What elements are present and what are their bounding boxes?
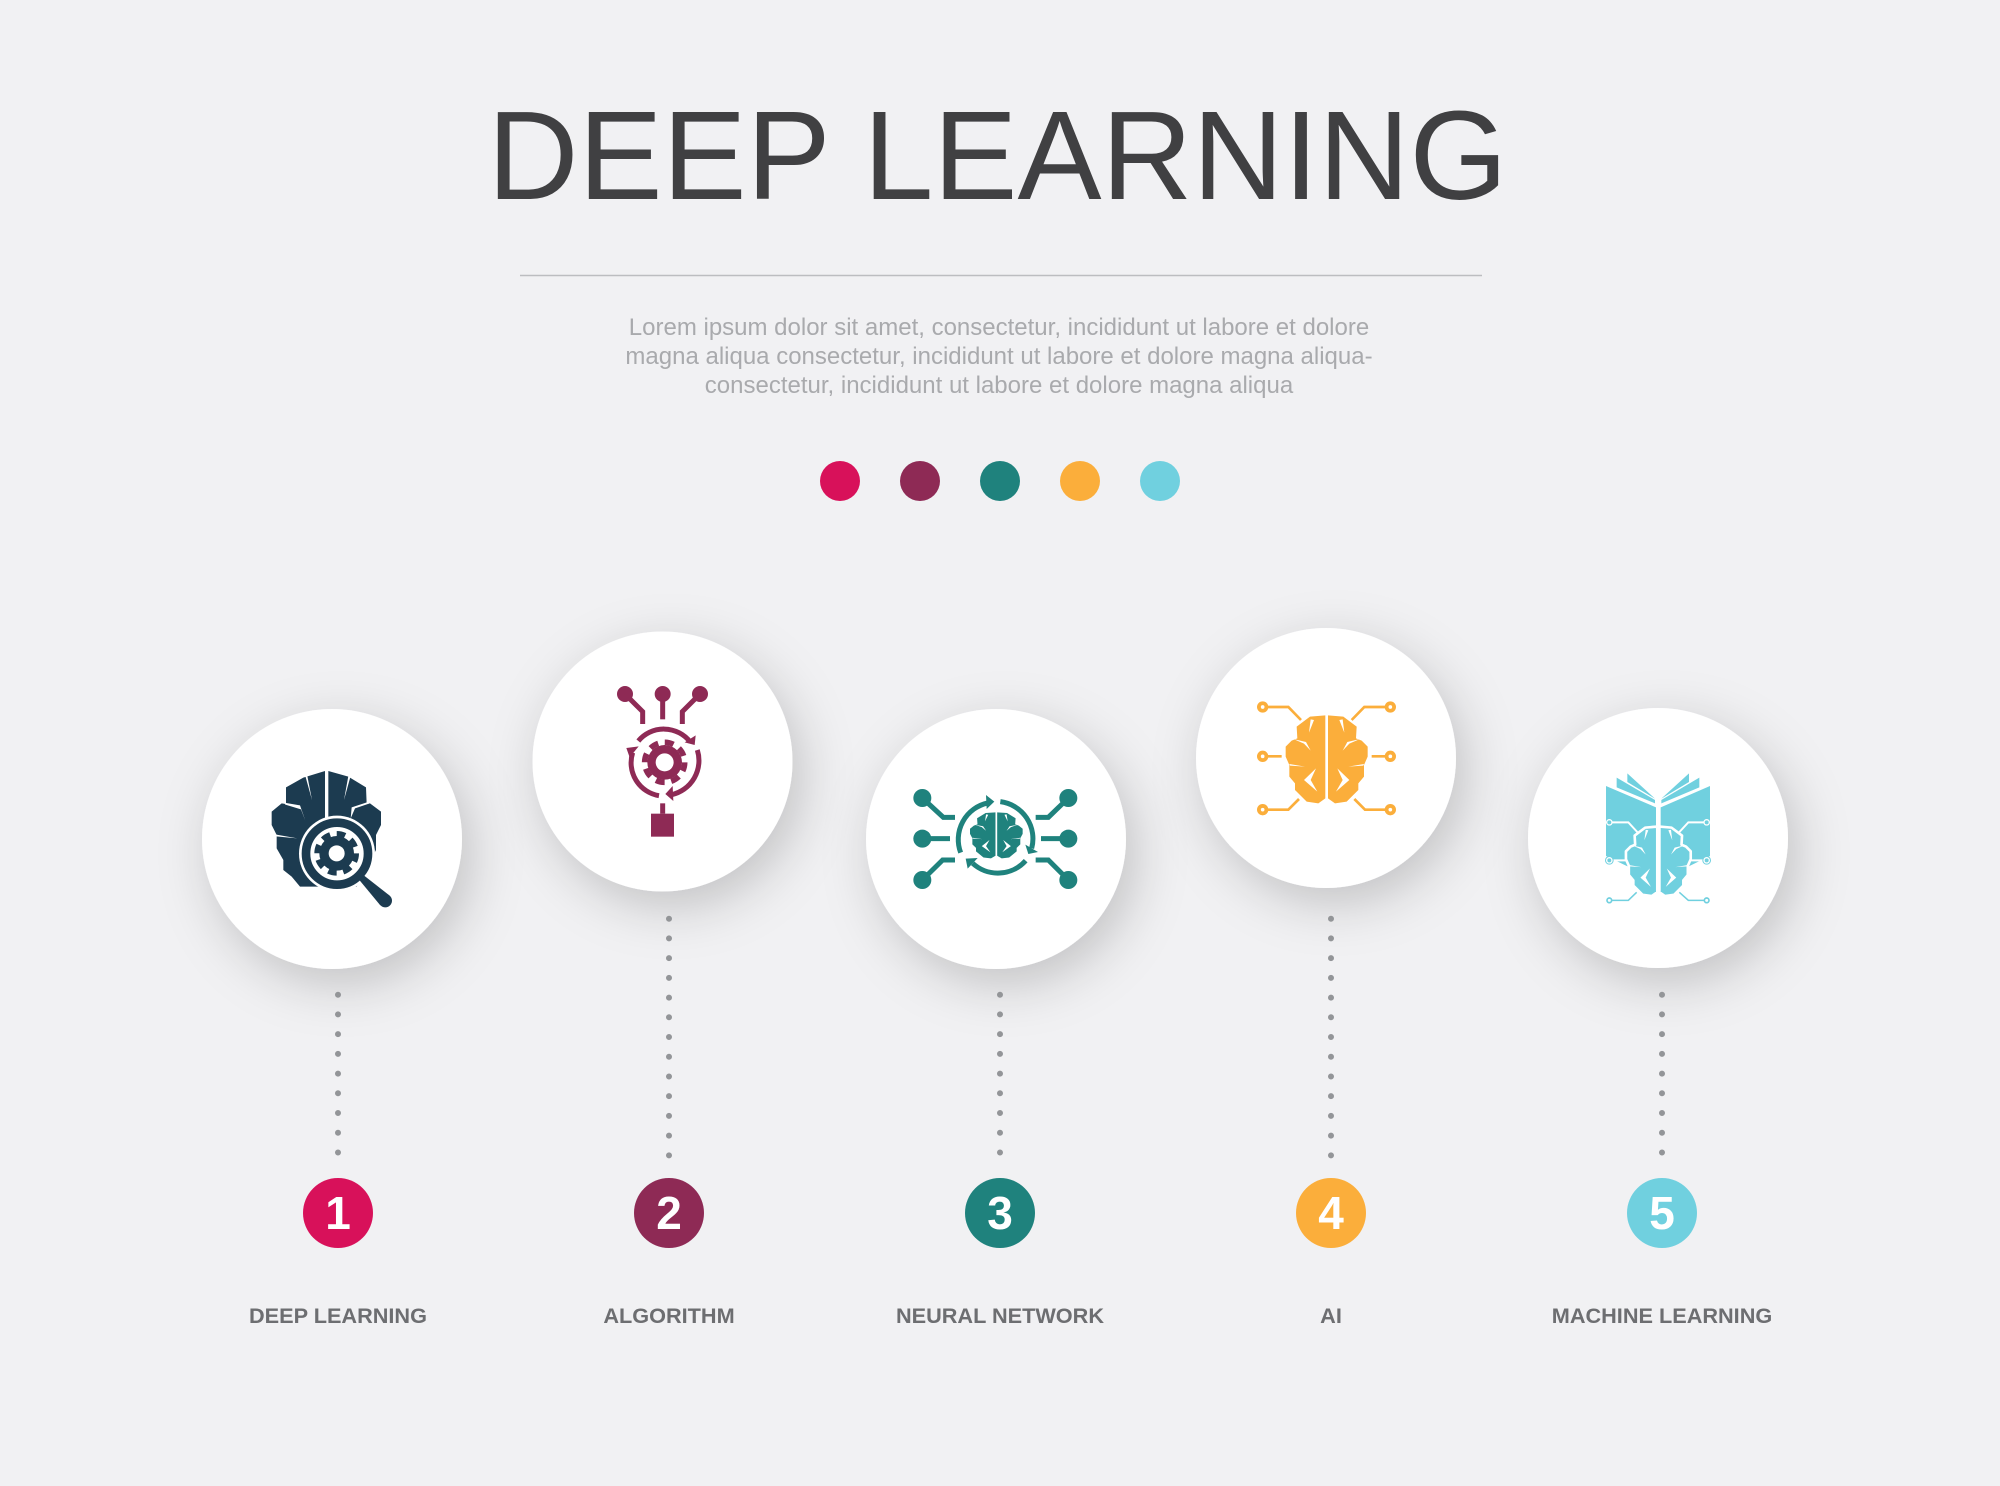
step labels: [249, 1303, 1772, 1328]
intro paragraph: Lorem ipsum dolor sit amet, consectetur, incididunt ut labore et dolore: [629, 314, 1369, 341]
panel: neural network circle: [866, 709, 1126, 969]
panel: deep learning circle: [202, 709, 462, 969]
step labels: NEURAL NETWORK: [896, 1303, 1104, 1328]
step 2 number badge: [634, 1178, 704, 1248]
dotted connectors: [338, 919, 1662, 1156]
step 4 number badge: [1296, 1178, 1366, 1248]
icon: neural network brain: [913, 789, 1077, 889]
step labels: AI: [1320, 1303, 1342, 1328]
title: DEEP LEARNING: [488, 85, 1508, 226]
step labels: MACHINE LEARNING: [1552, 1303, 1772, 1328]
colour legend dots: [820, 461, 1180, 501]
icon: AI brain with circuits: [1257, 701, 1396, 815]
step 3 number badge: 3: [987, 1187, 1013, 1239]
icon: brain with magnifier and gear: [272, 768, 392, 907]
panel: machine learning circle: [1528, 708, 1788, 968]
intro paragraph: magna aliqua consectetur, incididunt ut labore et dolore magna aliqua-: [625, 343, 1373, 370]
step labels: DEEP LEARNING: [249, 1303, 427, 1328]
icon: algorithm gear with inputs: [617, 686, 708, 837]
step 3 number badge: [965, 1178, 1035, 1248]
step 4 number badge: 4: [1318, 1187, 1344, 1239]
step labels: ALGORITHM: [603, 1303, 735, 1328]
step 1 number badge: 1: [325, 1187, 351, 1239]
step 1 number badge: [303, 1178, 373, 1248]
icon: book with brain: [1605, 773, 1711, 903]
step 5 number badge: [1627, 1178, 1697, 1248]
panel: algorithm circle: [532, 632, 792, 892]
intro paragraph: consectetur, incididunt ut labore et dolore magna aliqua: [705, 372, 1294, 399]
step 5 number badge: 5: [1649, 1187, 1675, 1239]
panel: AI circle: [1196, 628, 1456, 888]
step 2 number badge: 2: [656, 1187, 682, 1239]
intro paragraph: [625, 314, 1373, 399]
